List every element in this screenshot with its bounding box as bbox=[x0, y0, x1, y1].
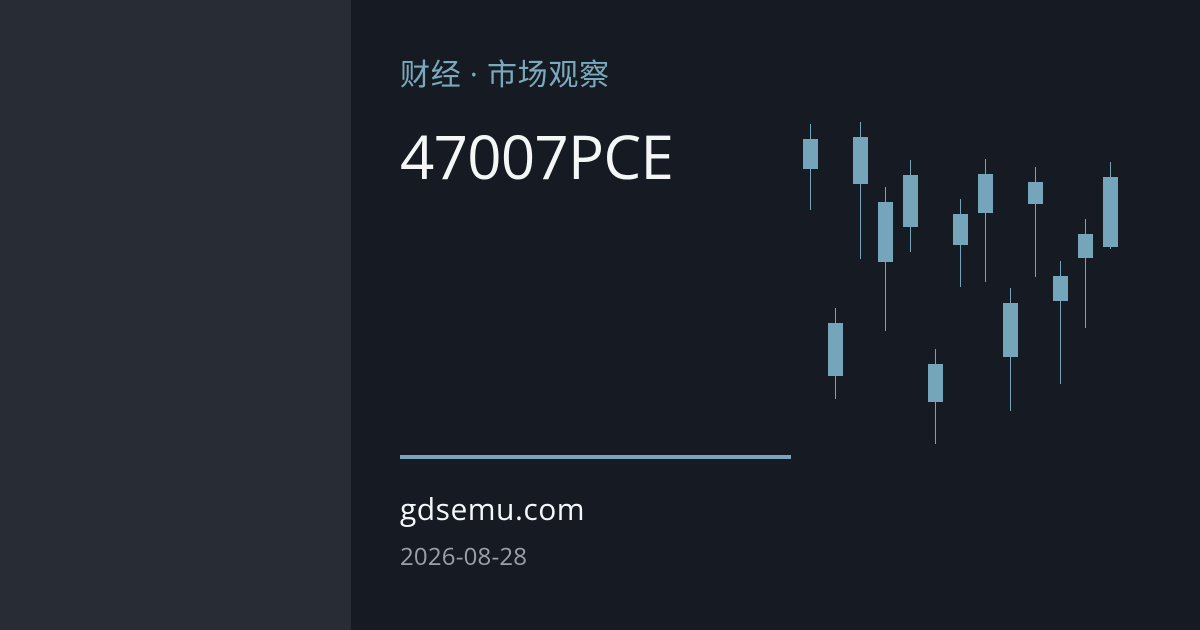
panel: left sidebar bbox=[0, 0, 351, 630]
title: 47007PCE bbox=[400, 115, 673, 197]
date: 2026-08-28 bbox=[400, 540, 527, 573]
site name: gdsemu.com bbox=[400, 488, 585, 529]
accent rule bbox=[400, 455, 791, 459]
category label: 财经 · 市场观察 bbox=[400, 53, 610, 94]
